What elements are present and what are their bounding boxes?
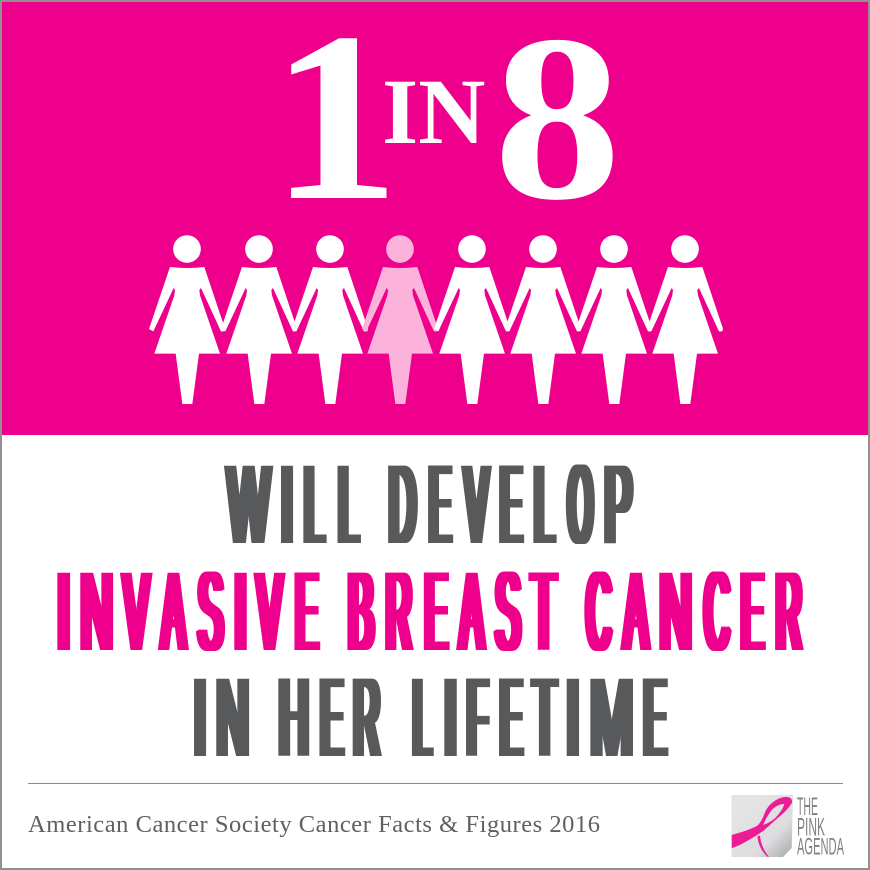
heading line 2: N (81, 549, 113, 674)
heading line 1: V (465, 442, 488, 567)
logo wordmark: PINK (797, 814, 825, 842)
heading: will develop invasive breast cancer in her lifetime: P (605, 442, 632, 567)
heading line 3: E (500, 655, 522, 780)
heading line 1: L (534, 442, 554, 567)
heading: will develop invasive breast cancer in her lifetime (57, 442, 801, 780)
heading line 3: E (321, 655, 343, 780)
title: 1 in 8: IN (382, 61, 485, 164)
heading line 1: E (430, 442, 450, 567)
logo paper square (732, 795, 793, 857)
heading line 2: S (198, 549, 223, 674)
divider rule (28, 783, 843, 784)
logo wordmark: THE (797, 793, 818, 821)
heading line 2: V (257, 549, 282, 674)
icon: woman 4 highlighted (362, 235, 438, 404)
heading line 2: E (425, 549, 447, 674)
heading line 3: H (279, 655, 309, 780)
heading line 3: R (354, 655, 380, 780)
heading line 2: E (296, 549, 318, 674)
icon: woman 3 (292, 235, 368, 404)
logo ribbon tail (758, 836, 769, 857)
heading line 3: F (467, 655, 487, 780)
heading line 3: M (590, 655, 633, 780)
heading line 3: I (194, 655, 206, 780)
heading line 2: E (741, 549, 763, 674)
heading line 3: N (217, 655, 249, 780)
heading line 2: T (532, 549, 555, 674)
heading line 2: N (660, 549, 692, 674)
heading line 2: I (234, 549, 247, 674)
heading line 1: L (339, 442, 357, 567)
heading line 3: T (533, 655, 556, 780)
heading line 2: R (386, 549, 411, 674)
chart: row of eight women, one highlighted (149, 235, 723, 404)
icon: woman 5 (434, 235, 510, 404)
infographic: R (776, 549, 801, 674)
heading line 2: V (124, 549, 149, 674)
logo: the pink agenda (732, 793, 844, 860)
heading line 2: A (162, 549, 185, 674)
panel: pink header (0, 0, 870, 435)
heading line 1: O (568, 442, 592, 567)
heading line 2: C (705, 549, 729, 674)
logo ribbon (732, 797, 792, 848)
heading: will develop invasive breast cancer in her lifetime: E (644, 655, 666, 780)
source text: American Cancer Society Cancer Facts & Figures 2016 (28, 811, 600, 838)
icon: woman 7 (576, 235, 652, 404)
heading line 2: S (496, 549, 520, 674)
heading line 2: A (460, 549, 483, 674)
heading line 2: B (348, 549, 374, 674)
heading line 3: I (566, 655, 579, 780)
logo wordmark (797, 793, 844, 860)
heading line 1: L (304, 442, 324, 567)
heading line 3: I (444, 655, 457, 780)
heading line 2: I (57, 549, 71, 674)
heading line 2: C (587, 549, 611, 674)
title: 1 in 8 (270, 0, 621, 251)
icon: woman 6 (505, 235, 581, 404)
heading line 1: D (389, 442, 416, 567)
icon: woman 2 (221, 235, 297, 404)
heading line 1: I (281, 442, 293, 567)
heading line 3: L (413, 655, 431, 780)
heading line 1: E (500, 442, 522, 567)
heading line 2: A (624, 549, 648, 674)
icon: woman 1 (149, 235, 225, 404)
heading line 1: W (228, 442, 270, 567)
icon: woman 8 (647, 235, 723, 404)
